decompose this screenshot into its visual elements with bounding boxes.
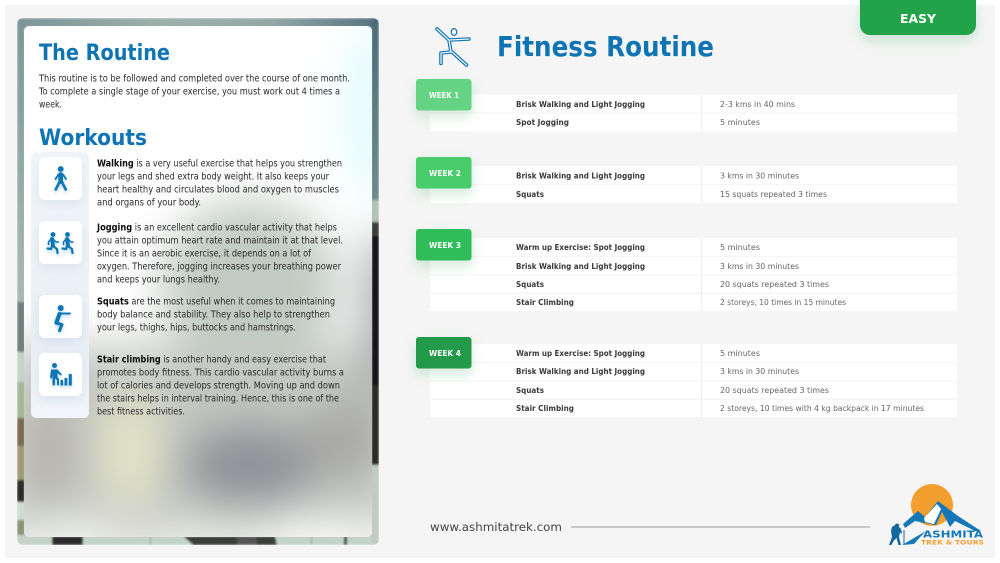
- text block: stair climbing: promotes body fitness. This cardio vascular activity burns a: [97, 368, 344, 378]
- table: week 4: Warm up Exercise: Spot Jogging: [516, 349, 645, 358]
- icon card: jogging: [39, 221, 82, 264]
- table: week 2: [416, 157, 957, 203]
- table: week 1: [416, 79, 957, 132]
- table: week 4: 5 minutes: [720, 349, 760, 358]
- text block: intro: week.: [39, 100, 62, 110]
- text block: squats: body balance and stability. They also help to strengthen: [97, 310, 330, 320]
- panel: frosted glass card: [24, 26, 372, 537]
- table: week 3: [416, 229, 957, 311]
- text block: stair climbing: the stairs helps in interval training. Hence, this is one of the: [97, 394, 339, 404]
- text block: stair climbing: best fitness activities.: [97, 406, 185, 418]
- table: week 3: 2 storeys, 10 times in 15 minutes: [720, 298, 846, 307]
- text block: stair climbing: Stair climbing is another handy and easy exercise that: [97, 354, 326, 366]
- table: week 4: Brisk Walking and Light Jogging: [516, 367, 645, 376]
- text block: intro: To complete a single stage of your exercise, you must work out 4 times a: [38, 86, 340, 98]
- table: week 3: 3 kms in 30 minutes: [720, 262, 799, 271]
- text block: stair climbing: lot of calories and develops strength. Moving up and down: [97, 380, 340, 392]
- text block: stair climbing: [97, 354, 344, 418]
- table: week 1: 2-3 kms in 40 mins: [720, 100, 795, 109]
- table: week 3: Warm up Exercise: Spot Jogging: [516, 243, 645, 252]
- text block: jogging: and keeps your lungs healthy.: [97, 274, 220, 286]
- text block: walking: heart healthy and circulates blood and oxygen to muscles: [97, 184, 339, 196]
- table: week 4: 2 storeys, 10 times with 4 kg backpack in 17 minutes: [720, 404, 924, 413]
- text block: squats: [97, 296, 335, 334]
- icon card: walking: [39, 157, 82, 200]
- text block: jogging: [96, 222, 343, 286]
- logo: Ashmita Trek & Tours: TREK & TOURS: [921, 538, 984, 546]
- badge: EASY: [860, 0, 976, 35]
- badge: week 1: WEEK 1: [429, 91, 459, 100]
- table: week 4: [416, 337, 957, 417]
- table: week 1: 5 minutes: [720, 118, 760, 127]
- badge: week 2: [416, 157, 472, 188]
- table: week 4: Squats: [516, 386, 544, 395]
- table: week 4: Stair Climbing: [516, 404, 574, 413]
- icon card: stair climbing: [39, 353, 82, 396]
- badge: week 2: WEEK 2: [429, 169, 461, 178]
- table: week 2: Squats: [516, 190, 544, 199]
- table: week 3: Brisk Walking and Light Jogging: [516, 262, 645, 271]
- icon card: squats: [39, 295, 82, 338]
- table: week 4: 20 squats repeated 3 times: [720, 386, 829, 395]
- text block: squats: Squats are the most useful when it comes to maintaining: [97, 296, 335, 308]
- table: week 2: Brisk Walking and Light Jogging: [516, 172, 645, 180]
- heading: Fitness Routine: Fitness Routine: [497, 30, 714, 63]
- badge: week 4: WEEK 4: [429, 349, 461, 358]
- text block: jogging: oxygen. Therefore, jogging increases your breathing power: [97, 262, 341, 272]
- text block: walking: your legs and shed extra body weight. It also keeps your: [97, 172, 329, 182]
- text block: walking: Walking is a very useful exercise that helps you strengthen: [97, 158, 342, 170]
- table: week 3: 5 minutes: [720, 243, 760, 252]
- text block: jogging: you attain optimum heart rate and maintain it at that level.: [97, 236, 343, 246]
- heading: The Routine: The Routine: [39, 41, 170, 66]
- panel: photo frame: [17, 18, 379, 545]
- badge: EASY: EASY: [900, 11, 937, 26]
- table: week 1: Spot Jogging: [516, 118, 569, 127]
- badge: week 3: WEEK 3: [429, 241, 461, 250]
- icon: fitness pose: [437, 29, 469, 65]
- text block: jogging: Jogging is an excellent cardio vascular activity that helps: [96, 222, 337, 234]
- text block: walking: [97, 158, 342, 208]
- table: week 3: Squats: [516, 280, 544, 289]
- logo: Ashmita Trek & Tours: ASHMITA: [923, 530, 984, 540]
- text block: walking: and organs of your body.: [97, 198, 201, 208]
- table: week 4: 3 kms in 30 minutes: [720, 367, 799, 376]
- text block: jogging: Since it is an aerobic exercise, it depends on a lot of: [97, 248, 312, 260]
- badge: week 1: [416, 79, 472, 110]
- heading: Workouts: Workouts: [39, 126, 147, 151]
- table: week 1: Brisk Walking and Light Jogging: [516, 100, 645, 109]
- badge: week 3: [416, 229, 472, 260]
- footer: website: www.ashmitatrek.com: [430, 520, 562, 534]
- text block: intro: [38, 74, 350, 110]
- table: week 2: 3 kms in 30 minutes: [720, 172, 799, 180]
- badge: week 4: [416, 337, 472, 368]
- text block: intro: This routine is to be followed and completed over the course of one month.: [38, 74, 350, 84]
- table: week 3: 20 squats repeated 3 times: [720, 280, 829, 289]
- text block: squats: your legs, thighs, hips, buttocks and hamstrings.: [97, 322, 296, 334]
- logo: Ashmita Trek & Tours: [889, 484, 984, 546]
- panel: icon strip: [31, 152, 89, 418]
- table: week 2: 15 squats repeated 3 times: [720, 190, 827, 199]
- table: week 3: Stair Climbing: [516, 298, 574, 307]
